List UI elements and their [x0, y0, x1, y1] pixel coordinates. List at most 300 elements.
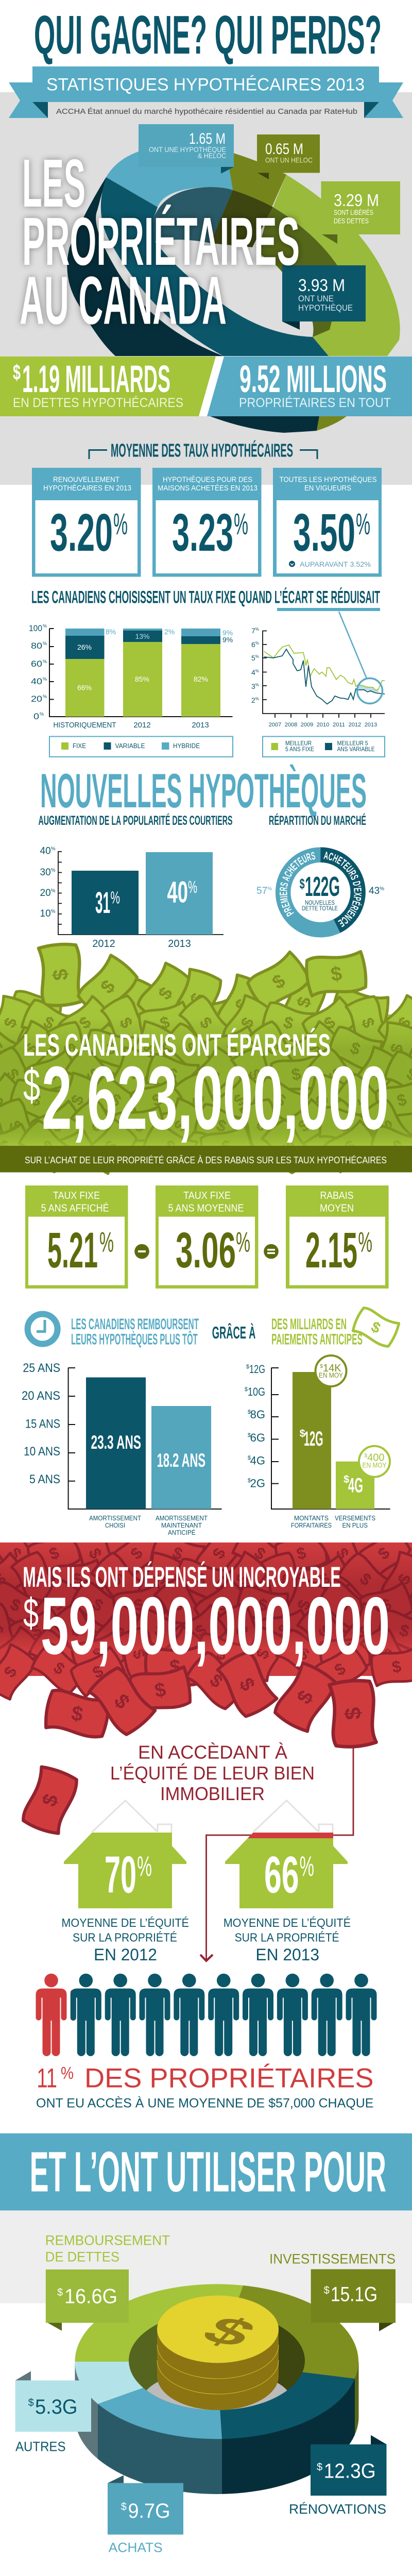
money bills: green cascade: [0, 943, 412, 1176]
legend: bar chart: [49, 737, 233, 757]
stacked bar chart: fixed vs variable: 8%: [106, 628, 116, 636]
callout: 1.65 M: 1.65 M: [189, 130, 226, 147]
money bills: red cascade: $: [194, 1569, 208, 1589]
money bills: green cascade: $: [348, 1038, 363, 1059]
bar chart: broker share: 30: [40, 867, 51, 878]
callout: renovations: RÉNOVATIONS: [289, 2501, 386, 2517]
caption: equity 2013: MOYENNE DE L’ÉQUITÉ: [224, 1916, 351, 1929]
rate card: hypothèques en vigueur: TOUTES LES HYPOTHÈQUES: [279, 475, 377, 484]
rate card: renouvellement: RENOUVELLEMENT: [53, 475, 119, 484]
money bills: green cascade: $: [252, 1118, 273, 1133]
stacked bar chart: fixed vs variable: %: [43, 676, 47, 682]
money bills: red cascade: $: [209, 1545, 229, 1562]
money bills: red cascade: $: [398, 1620, 411, 1641]
stacked bar chart: fixed vs variable: 2%: [164, 628, 175, 636]
money bills: green cascade: $: [37, 1136, 56, 1157]
money bills: green cascade: $: [41, 1012, 57, 1033]
bar chart: prepayments: EN MOY: [319, 1371, 344, 1379]
bar chart: broker share: %: [51, 888, 56, 894]
bar chart: broker share: 20: [40, 888, 51, 899]
line chart: best 5-year rates: %: [255, 654, 259, 659]
bar chart: prepayments: FORFAITAIRES: [291, 1521, 332, 1529]
money bills: green cascade: $: [272, 1090, 289, 1110]
bar chart: amortization: AMORTISSEMENT: [89, 1515, 141, 1522]
line chart: best 5-year rates: %: [255, 627, 259, 632]
money bills: green cascade: $: [203, 1064, 224, 1083]
bar chart: broker share: %: [51, 909, 56, 914]
money bills: red cascade: $: [5, 1544, 26, 1563]
money bills: red cascade: $: [152, 1620, 167, 1641]
money bills: green cascade: $: [0, 1015, 21, 1030]
money bills: red cascade: $: [129, 1646, 149, 1662]
rate card: maisons achetées: MAISONS ACHETÉES EN 2013: [158, 484, 258, 493]
heading: les propriétaires au Canada: [20, 145, 300, 338]
bar chart: amortization: CHOISI: [105, 1522, 125, 1529]
money bills: green cascade: $: [268, 970, 289, 993]
money bills: green cascade: $: [107, 1090, 125, 1110]
money bills: green cascade: $: [49, 968, 73, 981]
bar chart: prepayments: MONTANTS: [294, 1514, 329, 1522]
money bills: green cascade: $: [188, 1091, 209, 1109]
money bills: red cascade: $: [355, 1622, 376, 1639]
callout: 1.65 M: & HELOC: [198, 151, 226, 160]
bar chart: prepayments: VERSEMENTS: [335, 1514, 375, 1522]
heading: grâce à: GRÂCE À: [212, 1323, 255, 1342]
money bills: red falling: $: [109, 1690, 134, 1713]
callout: debt repayment: 16.6G: [64, 2285, 117, 2308]
callout: 3.93 M: ONT UNE: [298, 294, 334, 303]
text: accédant à l'équité: IMMOBILIER: [160, 1783, 265, 1804]
line chart: best 5-year rates: 2: [251, 696, 255, 704]
money bills: green cascade: $: [290, 1064, 302, 1084]
money bills: red cascade: $: [170, 1543, 185, 1564]
icon: green bill: $: [368, 1318, 383, 1337]
text: accédant à l'équité: L’ÉQUITÉ DE LEUR BIEN: [110, 1762, 315, 1784]
donut chart: market split: $: [300, 876, 305, 892]
callout: 3.93 M: 3.93 M: [298, 276, 345, 295]
rate card: hypothèques en vigueur: AUPARAVANT 3.52%: [300, 560, 371, 568]
text: accédant à l'équité: [110, 1741, 315, 1804]
bar chart: prepayments: $: [245, 1386, 248, 1393]
stacked bar chart: fixed vs variable: 80: [31, 641, 42, 651]
bar chart: prepayments: $: [320, 1364, 323, 1369]
money bills: green cascade: $: [3, 1065, 23, 1083]
line chart: best 5-year rates: %: [255, 697, 259, 701]
stacked bar chart: fixed vs variable: 26%: [77, 643, 92, 651]
bar chart: prepayments: 4G: [348, 1475, 363, 1497]
gray background: use of funds: [0, 2211, 412, 2303]
money bills: green cascade: $: [30, 1000, 42, 1020]
money bills: green cascade: $: [100, 1137, 121, 1156]
money bills: red cascade: $: [251, 1543, 269, 1564]
callout: others: $: [28, 2397, 34, 2409]
section: header: [9, 5, 403, 118]
infographic canvas: LEURS HYPOTHÈQUES PLUS TÔT: [71, 1330, 198, 1348]
money bills: green cascade: $: [88, 1116, 108, 1136]
rate card: maisons achetées: %: [234, 507, 248, 541]
money bills: green cascade: $: [43, 1064, 60, 1084]
money bills: red cascade: $: [336, 1595, 354, 1615]
heading: remboursent plus tôt: LES CANADIENS REMBOURSENT: [71, 1316, 199, 1333]
callout: 3.29 M: 3.29 M: [334, 191, 379, 210]
money bills: green cascade: $: [376, 1116, 397, 1135]
legend: bar chart: FIXE: [73, 742, 86, 750]
equation card: taux affiché: 5.21: [47, 1222, 98, 1278]
equation card: rabais: %: [358, 1226, 372, 1258]
money bills: red cascade: $: [212, 1595, 231, 1615]
money bills: green cascade: $: [139, 1040, 160, 1057]
bar chart: amortization: AMORTISSEMENT: [156, 1515, 208, 1522]
bar chart: amortization: 5 ANS: [29, 1472, 60, 1486]
money bills: red falling: $: [234, 1674, 259, 1694]
money bills: red cascade: $: [295, 1543, 308, 1564]
house: 2012 equity: 70: [105, 1846, 136, 1904]
money bills: green cascade: $: [186, 990, 209, 1007]
stacked bar chart: fixed vs variable: %: [43, 641, 47, 646]
money bills: green cascade: $: [263, 1039, 283, 1058]
line chart: best 5-year rates: 2009: [301, 722, 313, 728]
money bills: green cascade: $: [295, 1115, 314, 1136]
stacked bar chart: fixed vs variable: 100: [29, 623, 42, 633]
ribbon banner: [9, 66, 403, 118]
money bills: green cascade: $: [231, 996, 254, 1013]
bar chart: broker share: 2012: [92, 938, 115, 950]
money bills: red cascade: $: [332, 1545, 353, 1562]
money bills: green cascade: $: [118, 996, 140, 1013]
money bills: red cascade: $: [67, 1621, 88, 1640]
money bills: red falling: $: [293, 1687, 318, 1708]
legend: line chart: 5 ANS FIXE: [285, 745, 314, 753]
stacked bar chart: fixed vs variable: [29, 623, 233, 730]
equation card: rabais: [286, 1185, 389, 1289]
bar chart: amortization: 20 ANS: [22, 1389, 60, 1403]
money bills: green cascade: $: [21, 1039, 41, 1058]
money bills: red cascade: $: [192, 1620, 210, 1641]
money bills: green cascade: $: [162, 1136, 178, 1157]
callout: 3.93 M: HYPOTHÈQUE: [298, 303, 353, 313]
equation card: taux affiché: [25, 1185, 128, 1289]
donut chart: market split: NOUVELLES: [305, 899, 335, 906]
money bills: red falling: $: [70, 1702, 85, 1726]
bar chart: prepayments: 12G: [304, 1428, 323, 1450]
line chart: best 5-year rates: 2012: [349, 722, 361, 728]
bar chart: broker share: %: [51, 868, 56, 873]
money bills: red cascade: $: [376, 1645, 397, 1663]
line chart: best 5-year rates: [251, 612, 385, 728]
equation card: taux moyen: 3.06: [176, 1222, 236, 1278]
bar chart: prepayments: $: [344, 1474, 349, 1485]
callout: 1.65 M: ONT UNE HYPOTHÈQUE: [149, 145, 226, 154]
bar chart: amortization: 23.3 ANS: [91, 1432, 141, 1453]
callout: investments: $: [324, 2285, 330, 2296]
money bills: green cascade: $: [116, 1014, 136, 1031]
callout: 3.93 M: [282, 265, 366, 330]
operator: equals: [264, 1244, 279, 1259]
money bills: red cascade: $: [256, 1595, 269, 1615]
money bills: green cascade: $: [83, 1064, 102, 1084]
stats stripe: total debt and owners: PROPRIÉTAIRES EN TOUT: [239, 395, 391, 410]
equation card: taux moyen: TAUX FIXE: [183, 1190, 231, 1201]
money bills: green cascade: $: [278, 1137, 299, 1156]
caption: equity 2012: MOYENNE DE L’ÉQUITÉ: [61, 1916, 189, 1929]
stacked bar chart: fixed vs variable: 82%: [194, 675, 208, 683]
equation card: taux affiché: TAUX FIXE: [53, 1190, 100, 1201]
money bills: green cascade: $: [245, 1066, 265, 1082]
money bills: green cascade: $: [133, 1116, 145, 1136]
heading: paiements anticipés: [271, 1316, 363, 1348]
rate card: maisons achetées: HYPOTHÈQUES POUR DES: [163, 475, 252, 484]
callout: others: AUTRES: [15, 2439, 66, 2454]
money bills: red cascade: $: [273, 1571, 294, 1587]
rate card: hypothèques en vigueur: [273, 468, 382, 577]
line chart: best 5-year rates: 2011: [333, 722, 345, 728]
stats stripe: total debt and owners: $: [13, 360, 21, 384]
callout: renovations: [289, 2435, 386, 2517]
stacked bar chart: fixed vs variable: 9%: [222, 636, 233, 644]
3D donut chart: use of funds: $: [191, 2309, 267, 2355]
money bills: red falling: [0, 1641, 412, 1836]
stacked bar chart: fixed vs variable: 60: [31, 659, 42, 669]
money bills: red cascade: $: [6, 1644, 25, 1664]
money bills: red cascade: $: [90, 1643, 106, 1664]
stacked bar chart: fixed vs variable: %: [43, 623, 47, 629]
stacked bar chart: fixed vs variable: 66%: [77, 684, 92, 692]
stat: 11% of owners: ONT EU ACCÈS À UNE MOYENNE DE $57,000 CHAQUE: [36, 2096, 374, 2111]
callout: investments: 15.1G: [331, 2283, 377, 2306]
money bills: green cascade: $: [224, 1038, 239, 1059]
equation card: taux moyen: %: [236, 1226, 250, 1258]
red band background: [0, 1543, 412, 1676]
heading: les propriétaires au Canada: LES: [22, 145, 85, 221]
donut chart: market split: %: [380, 886, 384, 892]
bar chart: prepayments: 14K: [323, 1363, 341, 1374]
bar chart: prepayments: 12G: [249, 1363, 265, 1376]
equation card: taux moyen: 5 ANS MOYENNE: [168, 1202, 244, 1214]
money bills: red falling: $: [169, 1655, 182, 1679]
gray background: header: [0, 92, 412, 485]
heading: moyenne des taux: [89, 440, 317, 461]
money bills: green cascade: $: [237, 1014, 258, 1031]
stacked bar chart: fixed vs variable: 2012: [133, 721, 151, 730]
money bills: green cascade: $: [76, 1012, 95, 1033]
bar chart: prepayments: 400: [367, 1452, 384, 1463]
money bills: red cascade: $: [109, 1569, 128, 1589]
bar chart: amortization: 25 ANS: [23, 1361, 60, 1375]
money bills: green cascade: $: [304, 1039, 324, 1058]
callout: 1.65 M: [139, 124, 234, 174]
bar chart: prepayments: [245, 1355, 390, 1529]
line chart: best 5-year rates: 2007: [269, 722, 281, 728]
money bills: red cascade: $: [170, 1644, 191, 1663]
donut chart: market split: ACHETEURS D'EXPÉRIENCE: [323, 852, 362, 927]
rate card: hypothèques en vigueur: EN VIGUEURS: [304, 484, 351, 493]
money bills: red cascade: $: [149, 1571, 170, 1587]
bar chart: broker share: %: [51, 846, 56, 852]
line chart: best 5-year rates: 2010: [317, 722, 329, 728]
ribbon banner: STATISTIQUES HYPOTHÉCAIRES 2013: [46, 75, 365, 95]
callout: 0.65 M: 0.65 M: [265, 141, 303, 158]
money bills: green cascade: $: [293, 994, 315, 1010]
money bills: green cascade: $: [395, 1090, 408, 1110]
stats stripe: total debt and owners: [0, 357, 412, 416]
rate card: hypothèques en vigueur: %: [356, 507, 370, 541]
heading: savings amount: $: [23, 1059, 40, 1110]
rate card: hypothèques en vigueur: 3.50: [293, 503, 355, 562]
stacked bar chart: fixed vs variable: 20: [31, 694, 42, 704]
donut chart: market split: PREMIERS ACHETEURS: [279, 852, 315, 917]
money bills: green cascade: $: [312, 1092, 332, 1108]
money bills: red falling: $: [206, 1670, 227, 1692]
bar chart: amortization: 10 ANS: [24, 1445, 60, 1459]
money bills: red cascade: $: [232, 1569, 252, 1588]
money bills: green cascade: $: [59, 1041, 80, 1056]
text: accédant à l'équité: EN ACCÈDANT À: [138, 1741, 287, 1763]
bar chart: prepayments: $: [248, 1432, 251, 1438]
stat: 11% of owners: DES PROPRIÉTAIRES: [84, 2063, 374, 2093]
money bills: red falling: $: [0, 1663, 21, 1681]
stacked bar chart: fixed vs variable: 0: [33, 711, 39, 721]
money bills: green cascade: $: [390, 1136, 403, 1157]
equation card: taux affiché: %: [99, 1226, 114, 1258]
money bills: red cascade: $: [232, 1622, 252, 1639]
money bills: green cascade: $: [67, 1092, 88, 1108]
equation card: taux affiché: 5 ANS AFFICHÉ: [41, 1202, 109, 1214]
money bills: green cascade: $: [282, 1012, 295, 1033]
callout: purchases: 9.7G: [128, 2500, 170, 2522]
green band background: [0, 1014, 412, 1146]
money bills: red cascade: $: [85, 1545, 106, 1562]
stacked bar chart: fixed vs variable: 2013: [192, 721, 209, 730]
callout: others: 5.3G: [35, 2396, 77, 2418]
bar chart: broker share: %: [188, 877, 197, 896]
money bills: red cascade: $: [379, 1595, 394, 1615]
subheading: courtiers: AUGMENTATION DE LA POPULARITÉ DES COURTIERS: [38, 813, 232, 828]
money bills: red falling: $: [390, 1657, 403, 1676]
stacked bar chart: fixed vs variable: 13%: [135, 632, 150, 640]
callout: debt repayment: REMBOURSEMENT: [45, 2233, 170, 2248]
money bills: red cascade: $: [132, 1595, 146, 1615]
stats stripe: total debt and owners: 1.19 MILLIARDS: [22, 358, 170, 400]
callout: investments: [269, 2251, 396, 2331]
line chart: best 5-year rates: 5: [251, 654, 255, 662]
callout: debt repayment: DE DETTES: [45, 2249, 119, 2264]
icon: clock: [28, 1314, 58, 1344]
money bills: green cascade: $: [358, 1015, 379, 1030]
line chart: best 5-year rates: %: [255, 669, 259, 673]
money bills: red cascade: $: [215, 1643, 228, 1664]
line chart: best 5-year rates: 2008: [285, 722, 297, 728]
money bills: green cascade: $: [105, 1039, 117, 1058]
money bills: green cascade: $: [158, 1012, 171, 1033]
callout: 3.29 M: [321, 181, 400, 244]
caption: equity 2013: EN 2013: [255, 1945, 319, 1964]
money bills: red falling: $: [331, 1659, 349, 1680]
callout: debt repayment: $: [57, 2287, 63, 2298]
equation card: rabais: 2.15: [305, 1222, 357, 1278]
callout: others: [15, 2371, 91, 2454]
operator: minus: [134, 1244, 149, 1259]
house: 2012 equity: [64, 1801, 186, 1908]
donut chart: market split: 57: [256, 886, 267, 896]
money bills: red cascade: $: [89, 1595, 107, 1615]
bar chart: prepayments: $: [246, 1364, 249, 1370]
bar chart: broker share: %: [110, 888, 120, 907]
bar chart: amortization: [22, 1361, 222, 1536]
money bills: red cascade: $: [28, 1620, 44, 1641]
money bills: red falling: $: [50, 1658, 68, 1679]
legend: bar chart: HYBRIDE: [173, 742, 200, 750]
money bills: red cascade: $: [252, 1646, 273, 1662]
money bills: green cascade: $: [341, 1136, 359, 1157]
money bills: green cascade: $: [213, 1007, 230, 1029]
money bills: green cascade: $: [149, 1090, 165, 1110]
legend: line chart: ANS VARIABLE: [337, 745, 375, 753]
caption: equity 2013: SUR LA PROPRIÉTÉ: [235, 1931, 339, 1944]
money bills: red falling: $: [340, 1706, 366, 1721]
money bills: red cascade: $: [316, 1569, 333, 1589]
donut chart: market split: %: [267, 886, 272, 892]
money bills: green cascade: $: [354, 1090, 373, 1110]
bar chart: prepayments: $: [248, 1478, 251, 1484]
bar chart: prepayments: 8G: [250, 1408, 265, 1421]
equation card: rabais: RABAIS: [320, 1190, 353, 1201]
money bills: red cascade: $: [294, 1597, 314, 1613]
line chart: best 5-year rates: 6: [251, 640, 255, 649]
equation card: rabais: MOYEN: [320, 1202, 354, 1214]
money bills: green cascade: $: [96, 976, 119, 997]
bar chart: prepayments: 6G: [250, 1431, 265, 1444]
house: 2012 equity: %: [137, 1850, 152, 1882]
line chart: best 5-year rates: 3: [251, 682, 255, 690]
callout: purchases: $: [121, 2501, 127, 2513]
swirl graphic: homeowner breakdown: [67, 151, 400, 433]
money bills: green cascade: $: [121, 1066, 142, 1082]
legend: line chart: [263, 737, 385, 757]
rate card: maisons achetées: 3.23: [172, 503, 233, 562]
money bills: green cascade: $: [154, 984, 177, 1004]
bar chart: prepayments: 2G: [250, 1477, 265, 1490]
donut chart: market split: 122G: [305, 871, 340, 902]
money bills: green cascade: $: [339, 1116, 351, 1136]
house: 2013 equity: 66: [264, 1846, 299, 1904]
caption: equity 2013: [224, 1916, 351, 1964]
callout: 0.65 M: ONT UN HELOC: [265, 156, 313, 164]
line chart: best 5-year rates: 4: [251, 668, 255, 676]
money bills: green cascade: $: [330, 962, 344, 986]
money bills: red cascade: $: [127, 1544, 146, 1563]
money bills: green cascade: $: [366, 1065, 386, 1083]
bar chart: broker share: 40: [167, 875, 188, 909]
bar chart: broker share: 2013: [168, 938, 191, 950]
rate card: maisons achetées: [152, 468, 262, 577]
money bills: green cascade: $: [230, 1090, 249, 1110]
caption: equity 2012: [61, 1916, 189, 1964]
caption: equity 2012: EN 2012: [94, 1945, 157, 1964]
bar chart: prepayments: EN MOY: [363, 1461, 387, 1469]
subtitle: ACCHA État annuel du marché hypothécaire résidentiel au Canada par RateHub: [56, 107, 357, 116]
bar chart: prepayments: $: [300, 1428, 305, 1439]
money bills: green cascade: $: [170, 1117, 191, 1134]
money bills: green cascade: $: [5, 1117, 26, 1134]
caption: equity 2012: SUR LA PROPRIÉTÉ: [73, 1931, 177, 1944]
stats stripe: total debt and owners: EN DETTES HYPOTHÉCAIRES: [13, 395, 183, 410]
bar chart: broker share: [40, 846, 224, 950]
callout: debt repayment: [45, 2233, 170, 2331]
money bills: green cascade: $: [386, 1042, 407, 1055]
bar chart: prepayments: 10G: [248, 1385, 265, 1398]
money bills: red falling: $: [153, 1679, 167, 1702]
stacked bar chart: fixed vs variable: 85%: [135, 675, 149, 683]
